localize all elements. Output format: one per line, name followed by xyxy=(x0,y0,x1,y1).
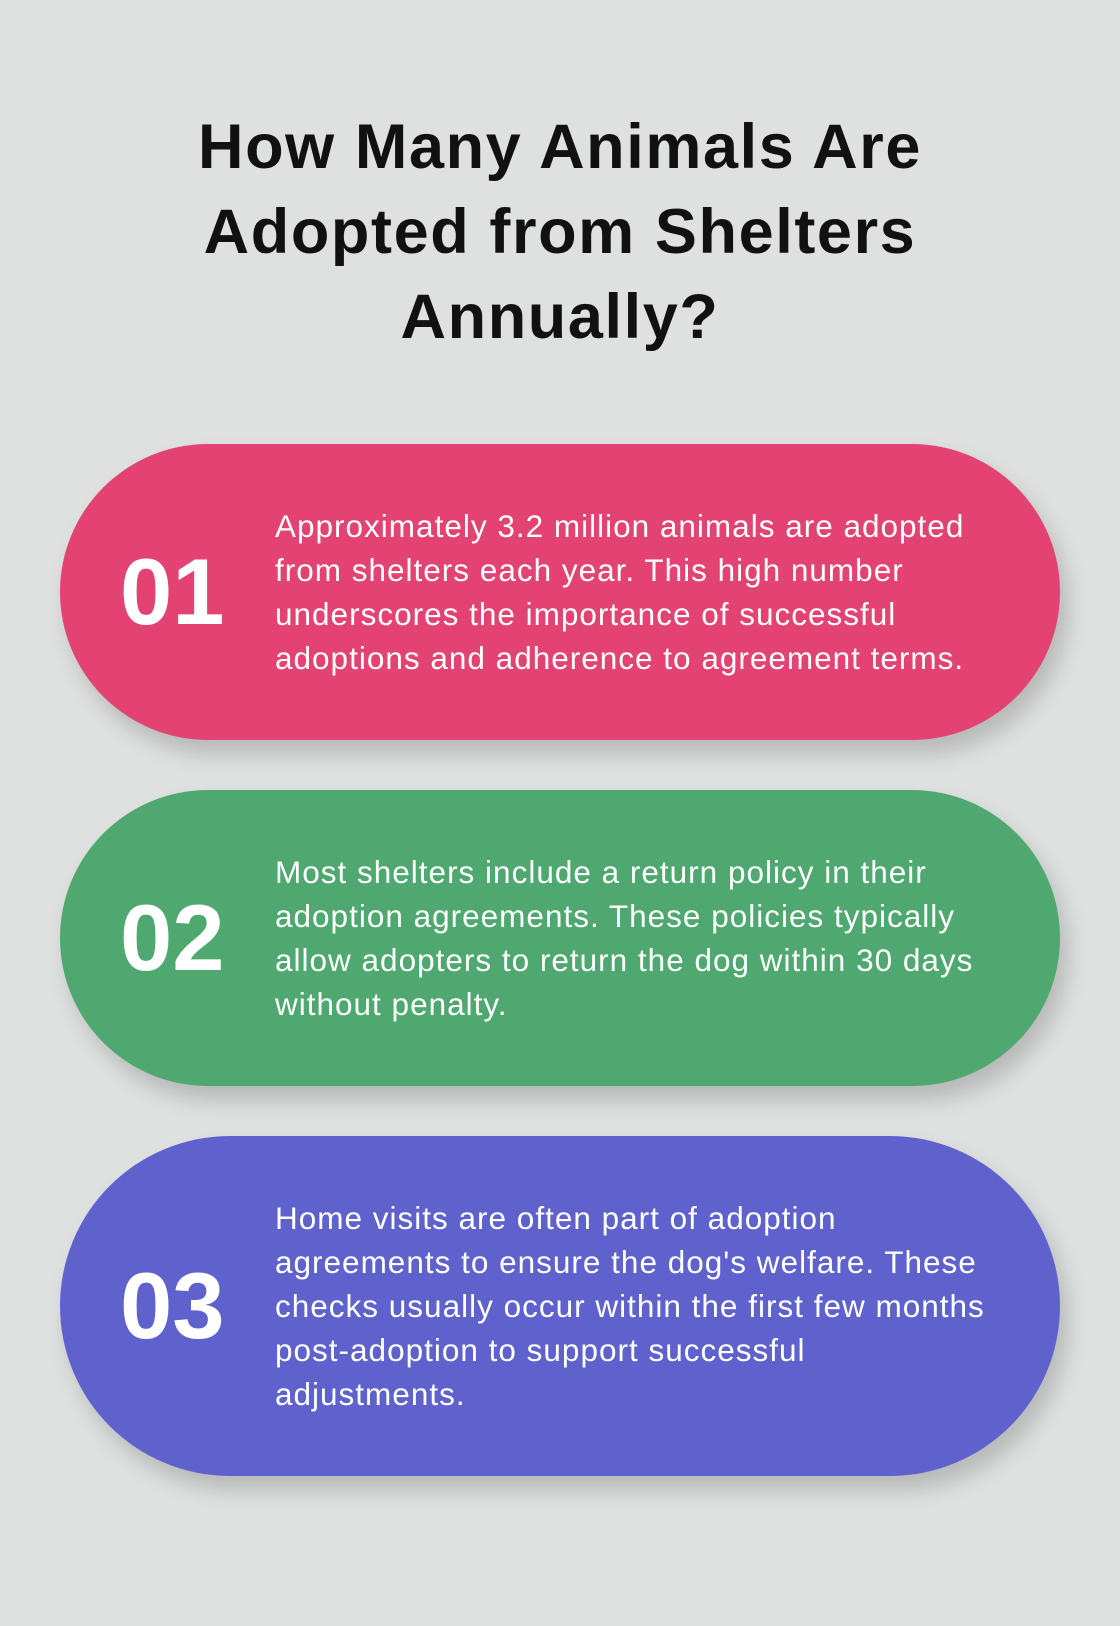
number 01: 01 xyxy=(120,539,225,644)
text 01: adoptions and adherence to agreement terms. xyxy=(275,640,964,676)
number 03: 03 xyxy=(120,1253,225,1358)
text 02: allow adopters to return the dog within 30 days xyxy=(275,942,973,978)
title: How Many Animals Are xyxy=(198,112,922,182)
panel: step 01 xyxy=(60,444,1060,740)
title: Adopted from Shelters xyxy=(204,197,916,267)
title: Annually? xyxy=(401,282,719,352)
text 02: Most shelters include a return policy in their xyxy=(275,854,927,890)
text 03: Home visits are often part of adoption xyxy=(275,1200,837,1236)
text 02: adoption agreements. These policies typically xyxy=(275,898,955,934)
text 03: agreements to ensure the dog's welfare. These xyxy=(275,1244,977,1280)
panel: step 03 xyxy=(60,1136,1060,1476)
text 01: from shelters each year. This high number xyxy=(275,552,904,588)
text 01 xyxy=(275,508,964,676)
text 03: adjustments. xyxy=(275,1376,466,1412)
text 02 xyxy=(275,854,973,1022)
panel: step 02 xyxy=(60,790,1060,1086)
title xyxy=(198,112,922,352)
number 02: 02 xyxy=(120,885,225,990)
text 01: underscores the importance of successful xyxy=(275,596,896,632)
text 03: post-adoption to support successful xyxy=(275,1332,806,1368)
text 03 xyxy=(275,1200,985,1412)
text 03: checks usually occur within the first few months xyxy=(275,1288,985,1324)
text 02: without penalty. xyxy=(275,986,508,1022)
text 01: Approximately 3.2 million animals are adopted xyxy=(275,508,964,544)
